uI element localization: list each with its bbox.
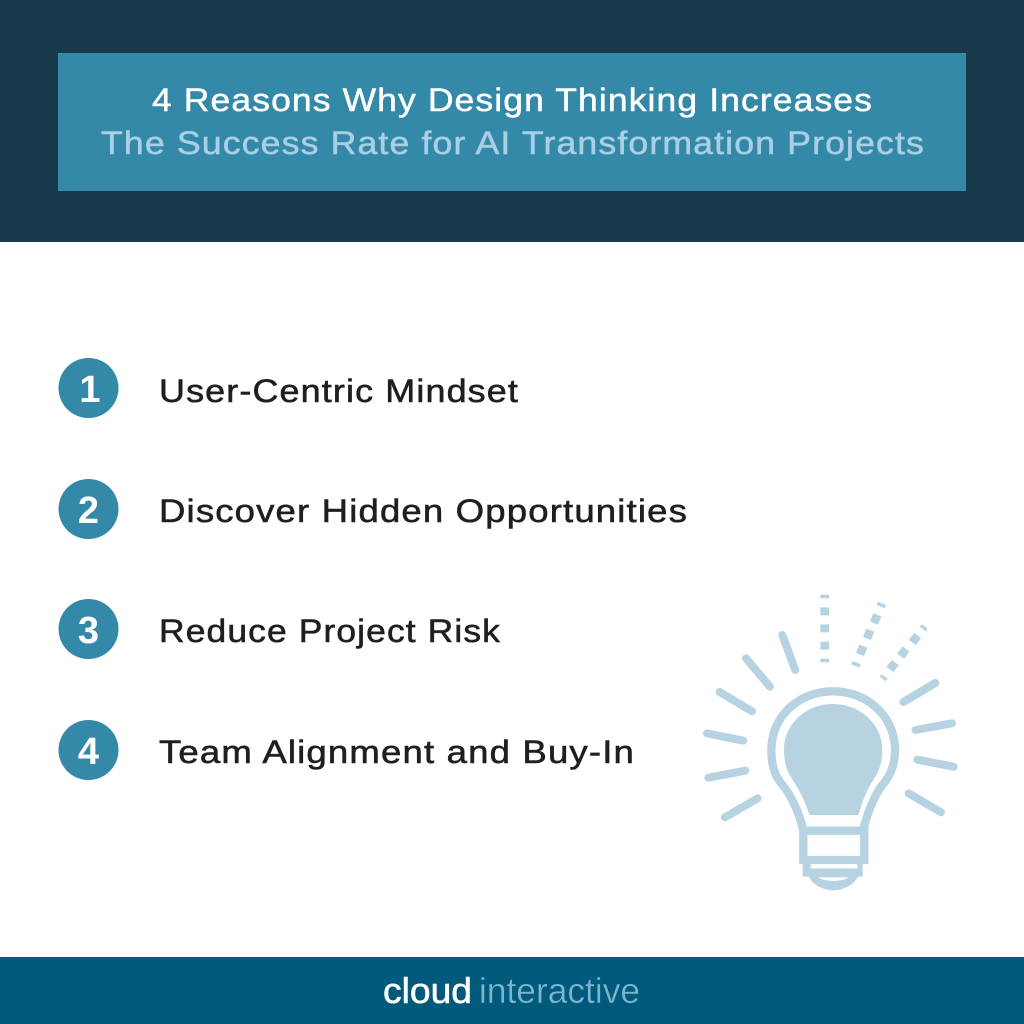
list item 4 <box>58 720 635 780</box>
list item 3: Reduce Project Risk <box>159 613 501 649</box>
list item 2 <box>58 479 688 539</box>
logo: cloud interactive <box>383 970 640 1011</box>
footer band <box>0 957 1024 1024</box>
list item 4: Team Alignment and Buy-In <box>159 734 635 770</box>
logo: cloud interactive: interactive <box>479 970 640 1011</box>
icon: light bulb with rays <box>707 595 954 890</box>
list item 4: 4 <box>78 731 99 773</box>
list item 1: 1 <box>79 369 101 411</box>
logo: cloud interactive: cloud <box>383 970 472 1011</box>
title line 1: 4 Reasons Why Design Thinking Increases <box>152 82 873 118</box>
list item 1: User-Centric Mindset <box>159 373 519 409</box>
title panel <box>58 53 966 191</box>
list item 3: 3 <box>78 610 99 652</box>
title line 2: The Success Rate for AI Transformation Projects <box>101 125 925 161</box>
list item 1 <box>58 358 519 418</box>
list item 3 <box>58 599 501 659</box>
list item 2: Discover Hidden Opportunities <box>159 493 688 529</box>
list item 2: 2 <box>78 490 99 532</box>
header band <box>0 0 1024 242</box>
